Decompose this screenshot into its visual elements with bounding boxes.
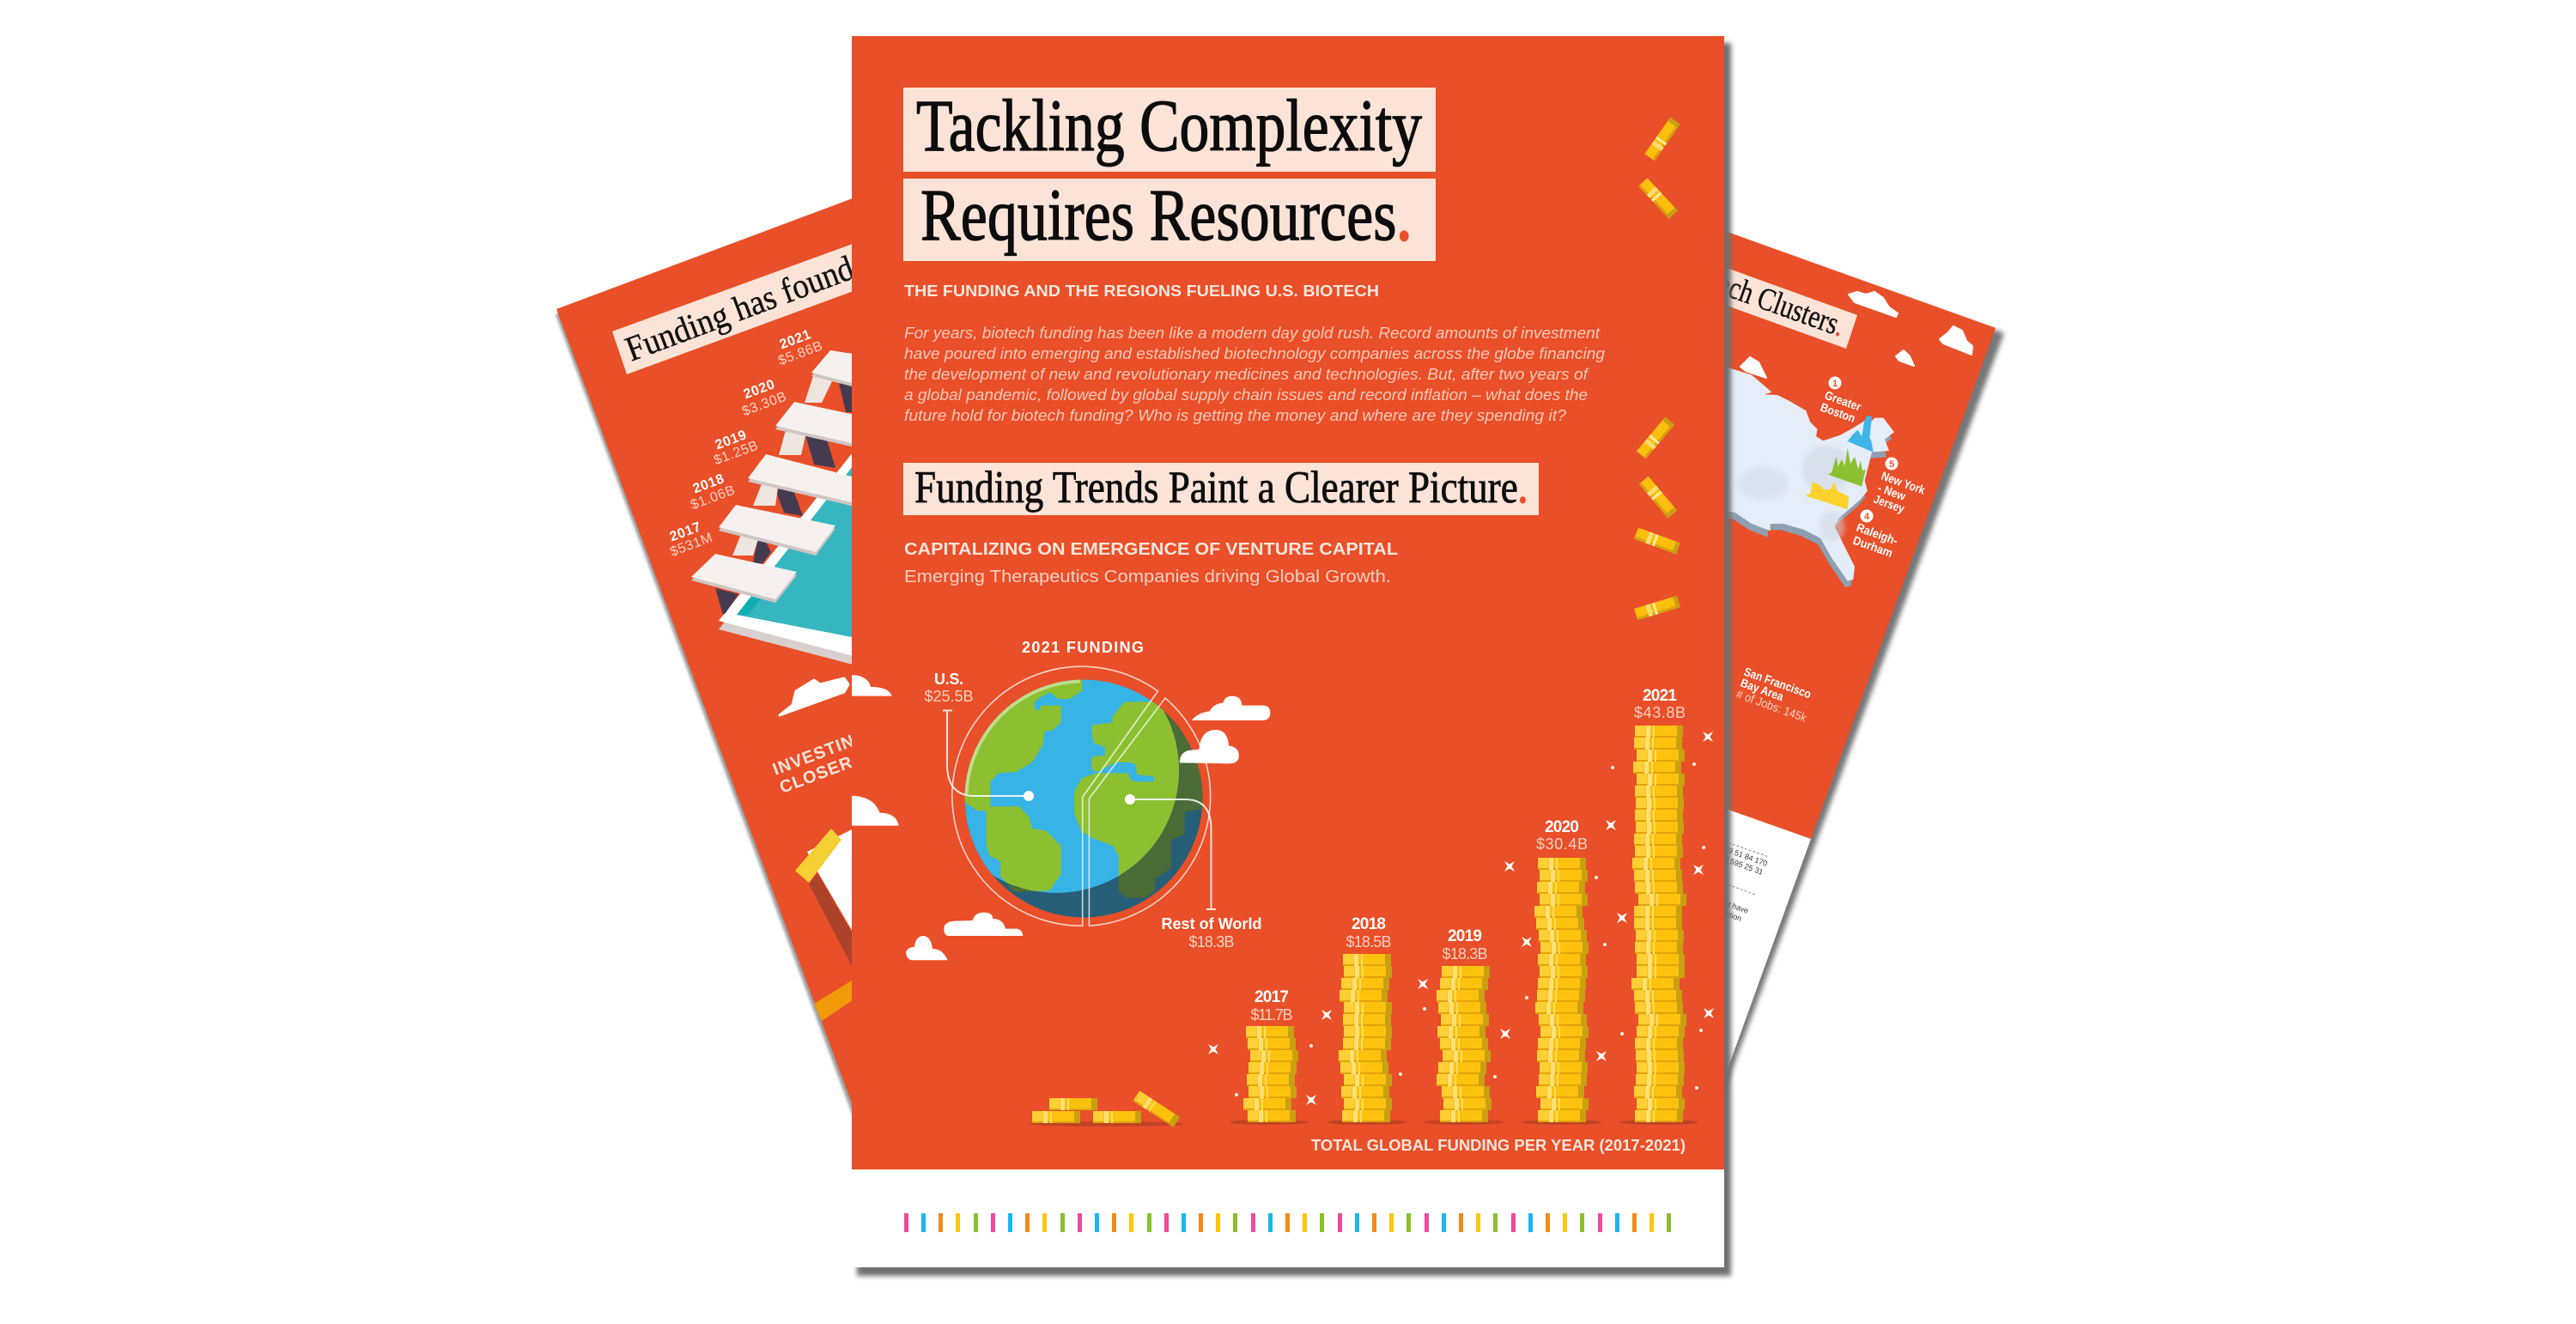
stair labels: 2020	[742, 377, 777, 402]
pinned note	[795, 826, 859, 1021]
main page shadow	[857, 43, 1731, 1276]
cluster labels: Boston	[1819, 400, 1857, 425]
ring: rest of world share	[1089, 698, 1211, 926]
city icon: New York	[1828, 448, 1866, 487]
panel: main page	[849, 36, 1724, 1267]
chart title: 2021 FUNDING	[1022, 639, 1144, 656]
U.S. label	[924, 671, 974, 705]
stair labels: $1.25B	[712, 438, 761, 468]
cluster labels: Raleigh-	[1855, 520, 1900, 548]
left page shadow	[556, 169, 945, 1206]
stack: 2019: $18.3B	[1443, 945, 1487, 963]
chart caption: TOTAL GLOBAL FUNDING PER YEAR (2017-2021)	[1311, 1137, 1686, 1154]
stair platforms	[691, 350, 859, 603]
section heading: Funding Trends Paint a Clearer Picture.	[914, 463, 1528, 513]
city icon: Raleigh	[1806, 483, 1849, 509]
stair flights	[732, 376, 833, 556]
title: Requires Resources.	[920, 173, 1412, 256]
stack: 2020: $30.4B	[1536, 835, 1588, 853]
intro paragraph: future hold for biotech funding? Who is getting the money and where are they spending it?	[904, 407, 1566, 424]
rest of world label: $18.3B	[1188, 933, 1235, 950]
left page section heading: CLOSER LOOK	[777, 732, 910, 798]
infographic: three fanned brochure pages	[555, 36, 2007, 1279]
intro paragraph: have poured into emerging and established biotechnology companies across the globe financing	[904, 345, 1605, 362]
stair labels: $3.30B	[740, 389, 789, 419]
stack: 2021	[1631, 687, 1686, 1122]
intro paragraph	[904, 325, 1605, 424]
stack: 2020: 2020	[1545, 818, 1579, 836]
title	[903, 84, 1436, 261]
panel: left back page	[556, 164, 945, 1206]
left page body	[556, 164, 945, 1202]
left page heading	[612, 210, 945, 374]
footer notes: information	[1704, 902, 1743, 923]
stair labels: $1.06B	[689, 483, 738, 513]
stack: 2018: $18.5B	[1346, 933, 1391, 950]
stack: 2021: $43.8B	[1634, 704, 1686, 721]
cluster labels: New York	[1880, 469, 1927, 497]
gold bars column	[1634, 118, 1680, 620]
rest of world label: Rest of World	[1161, 915, 1262, 932]
stack: 2019: 2019	[1448, 927, 1482, 945]
panel: right back page	[1631, 197, 2004, 1133]
right page orange body	[1631, 197, 1996, 839]
pillars	[715, 383, 852, 615]
clouds around globe	[849, 675, 1270, 960]
right page shadow	[1631, 203, 2004, 1133]
stair labels: 2021	[778, 327, 813, 352]
subtitle: THE FUNDING AND THE REGIONS FUELING U.S. BIOTECH	[904, 282, 1379, 300]
cluster labels: - New	[1876, 481, 1908, 503]
stair labels: $531M	[668, 531, 715, 560]
main page orange body	[852, 36, 1724, 1169]
stair labels: 2019	[714, 428, 749, 452]
footer notes	[1700, 833, 1769, 923]
right page white footer	[1631, 775, 1811, 1121]
section description: Emerging Therapeutics Companies driving Global Growth.	[904, 568, 1391, 586]
footer notes: 79 51 84 170	[1723, 845, 1769, 868]
coin chart: total global funding per year	[1208, 687, 1714, 1154]
sparkles	[1208, 732, 1714, 1105]
rest of world label	[1161, 915, 1262, 950]
stack: 2018	[1339, 915, 1392, 1122]
stack: 2018: 2018	[1352, 915, 1386, 933]
city icon: Boston	[1848, 416, 1874, 452]
globe	[958, 677, 1208, 917]
cluster labels: 5	[1889, 459, 1894, 470]
section subheading: CAPITALIZING ON EMERGENCE OF VENTURE CAPITAL	[904, 540, 1398, 559]
stair labels: $5.86B	[776, 338, 825, 368]
stack: 2017	[1243, 988, 1298, 1122]
left page heading: Funding has found	[620, 247, 859, 368]
pool illustration	[719, 448, 856, 665]
cluster labels: Greater	[1823, 388, 1863, 414]
stack: 2017: $11.7B	[1250, 1006, 1293, 1023]
cloud	[780, 678, 848, 715]
stair labels: 2018	[691, 471, 726, 496]
intro paragraph: the development of new and revolutionary medicines and technologies. But, after two years of	[904, 366, 1589, 383]
cluster labels: Bay Area	[1739, 676, 1786, 703]
rainbow tick strip	[904, 1213, 1671, 1232]
cluster labels	[1735, 376, 1927, 725]
U.S. callout	[943, 711, 1034, 801]
stack: 2021: 2021	[1643, 687, 1677, 705]
intro paragraph: For years, biotech funding has been like a modern day gold rush. Record amounts of investment	[904, 325, 1601, 342]
right page heading	[1631, 234, 1857, 349]
U.S. label: U.S.	[934, 671, 963, 688]
stack: 2017: 2017	[1255, 988, 1289, 1006]
cluster labels: 1	[1832, 379, 1838, 389]
rest of world callout	[1125, 794, 1216, 909]
footer notes: 093 595 25 31	[1715, 852, 1765, 877]
stack: 2020	[1534, 818, 1589, 1122]
US map	[1704, 361, 1894, 587]
title: Tackling Complexity	[916, 84, 1422, 167]
cluster labels: Jersey	[1872, 492, 1906, 515]
stair labels	[668, 327, 825, 560]
cluster labels: San Francisco	[1742, 665, 1814, 701]
footer notes: might have	[1711, 895, 1750, 915]
ring: U.S. share	[952, 666, 1157, 926]
stack shadows	[1230, 1120, 1698, 1125]
U.S. label: $25.5B	[924, 688, 974, 705]
cluster labels: # of Jobs: 145k	[1735, 687, 1809, 725]
globe chart: 2021 funding	[924, 639, 1262, 950]
stair labels: 2017	[668, 519, 703, 544]
clouds	[1741, 292, 1972, 378]
left page section heading: INVESTING	[770, 726, 871, 780]
stack: 2019	[1437, 927, 1492, 1122]
cluster labels: Durham	[1851, 533, 1895, 560]
right page heading: Biotech Clusters.	[1672, 252, 1850, 344]
main page white footer	[852, 1169, 1724, 1267]
cluster labels: 4	[1864, 512, 1870, 522]
intro paragraph: a global pandemic, followed by global supply chain issues and record inflation – what does the	[904, 386, 1588, 404]
loose coins	[1029, 1090, 1183, 1127]
